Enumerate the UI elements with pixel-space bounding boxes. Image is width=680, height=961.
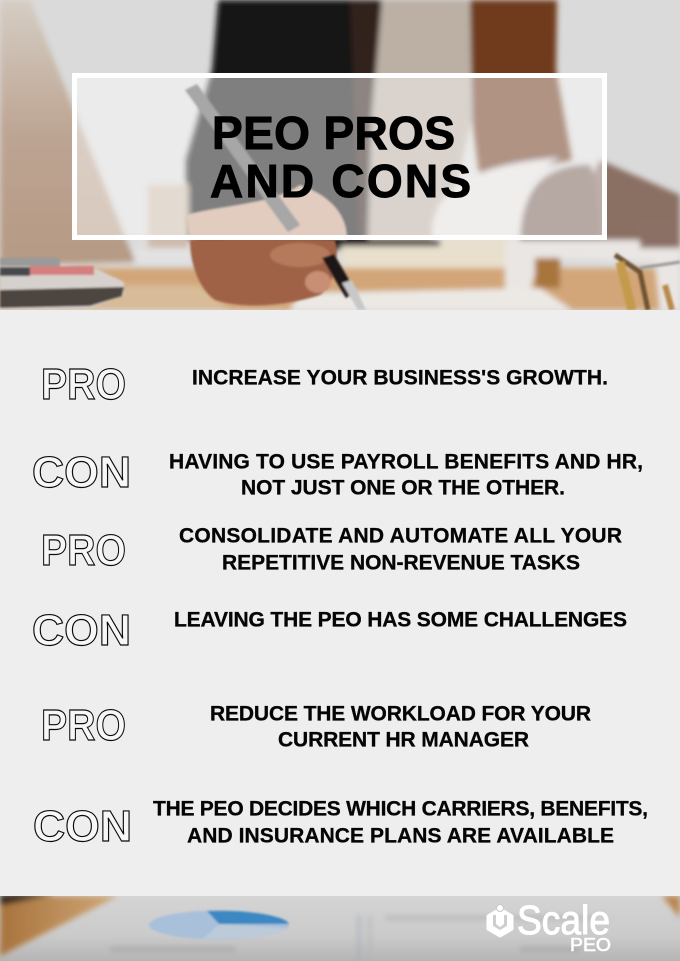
title: AND CONS: [210, 155, 471, 207]
panel: pros and cons list: [32, 360, 648, 851]
row 1 text: INCREASE YOUR BUSINESS'S GROWTH.: [192, 366, 608, 390]
row 6 text: AND INSURANCE PLANS ARE AVAILABLE: [187, 824, 614, 848]
row 6 text: [153, 798, 648, 848]
logo: Scale PEO: [488, 897, 611, 955]
row 3 pro label: PRO: [41, 526, 126, 575]
row 4 con label: CON: [32, 606, 131, 655]
row 2 text: NOT JUST ONE OR THE OTHER.: [241, 476, 565, 500]
icon: pen in hand: [185, 84, 366, 310]
icon: glasses: [615, 255, 680, 310]
icon: calculator: [0, 258, 124, 310]
row 3 text: CONSOLIDATE AND AUTOMATE ALL YOUR: [179, 524, 622, 548]
row 4 text: LEAVING THE PEO HAS SOME CHALLENGES: [174, 608, 627, 632]
row 3 text: REPETITIVE NON-REVENUE TASKS: [222, 552, 580, 574]
row 2 text: HAVING TO USE PAYROLL BENEFITS AND HR,: [169, 450, 643, 474]
row 3 text: [179, 524, 622, 574]
pie chart: [149, 910, 289, 940]
row 5 pro label: PRO: [41, 701, 126, 750]
row 6 con label: CON: [33, 802, 132, 851]
icon: shield: [488, 904, 512, 936]
row 5 text: CURRENT HR MANAGER: [278, 728, 529, 752]
title: PEO PROS: [212, 107, 455, 159]
row 5 text: [210, 702, 591, 752]
icon: hand upper part: [186, 185, 347, 240]
row 2 text: [169, 450, 643, 500]
row 6 text: THE PEO DECIDES WHICH CARRIERS, BENEFITS,: [153, 798, 648, 820]
header photo: desk and hand writing: [0, 0, 680, 310]
logo: Scale PEO: PEO: [570, 935, 611, 955]
footer photo: charts on paper: [0, 894, 680, 961]
row 1 pro label: PRO: [41, 360, 126, 409]
title: [210, 107, 471, 207]
title box: [72, 73, 607, 240]
logo: Scale PEO: Scale: [517, 897, 610, 943]
row 5 text: REDUCE THE WORKLOAD FOR YOUR: [210, 702, 591, 726]
row 2 con label: CON: [32, 448, 131, 497]
